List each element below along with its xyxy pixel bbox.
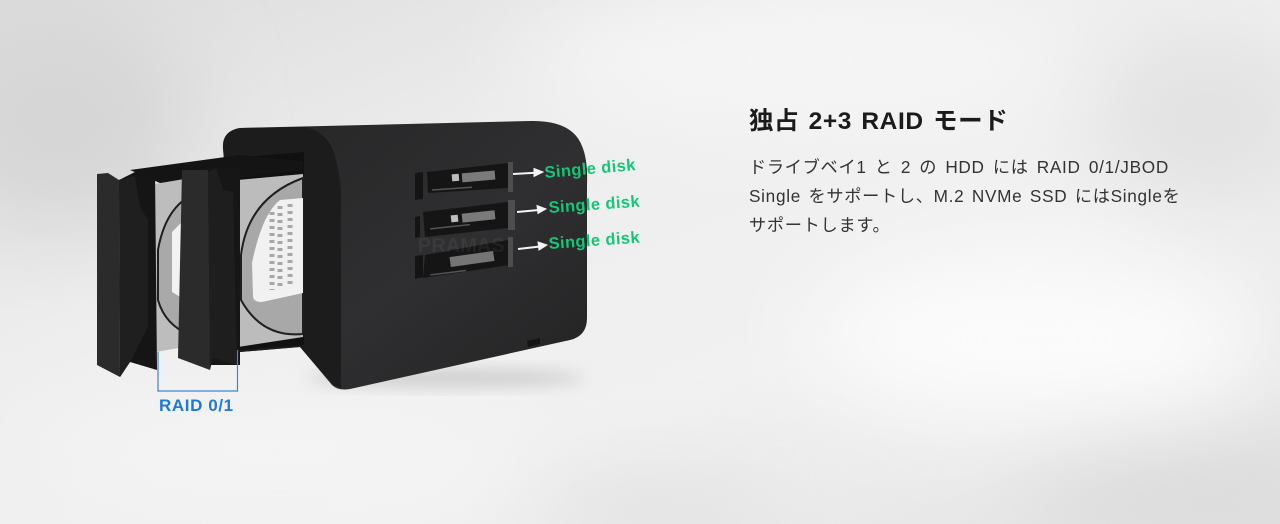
tray post right	[205, 168, 240, 365]
hard drive right	[238, 174, 303, 347]
tray handle left	[97, 173, 120, 377]
left drive tray	[97, 155, 303, 377]
enclosure body	[223, 121, 587, 390]
bay opening	[232, 152, 304, 350]
enclosure shadow	[305, 369, 585, 387]
description: Single をサポートし、M.2 NVMe SSD にはSingleを	[749, 186, 1180, 206]
tray handle right	[178, 170, 210, 370]
arrow: SSD 3	[518, 242, 547, 250]
label: Single disk 2: Single disk	[548, 193, 641, 217]
enclosure feet	[527, 338, 540, 347]
label: RAID 0/1: RAID 0/1	[159, 396, 234, 415]
NAS enclosure	[223, 121, 587, 390]
front face	[223, 127, 341, 388]
label: Single disk 3: Single disk	[548, 229, 641, 253]
description: サポートします。	[749, 215, 890, 235]
SSD 3	[415, 237, 513, 279]
M.2 SSD slots	[415, 162, 515, 279]
hard drive left	[155, 178, 190, 352]
tray post left	[119, 172, 157, 377]
tray top rail	[130, 155, 303, 183]
description: ドライブベイ1 と 2 の HDD には RAID 0/1/JBOD	[749, 157, 1169, 177]
hard drive label	[252, 198, 303, 302]
title: 独占 2+3 RAID モード	[749, 108, 1008, 135]
right drive tray	[178, 168, 303, 370]
SSD 1	[415, 162, 513, 200]
RAID bracket	[158, 350, 238, 391]
watermark: PRAMAS	[418, 235, 505, 257]
description	[749, 157, 1180, 235]
label: Single disk 1: Single disk	[544, 156, 637, 182]
arrow: SSD 2	[517, 206, 546, 214]
SSD 2	[415, 200, 515, 238]
arrow: SSD 1	[513, 168, 543, 176]
